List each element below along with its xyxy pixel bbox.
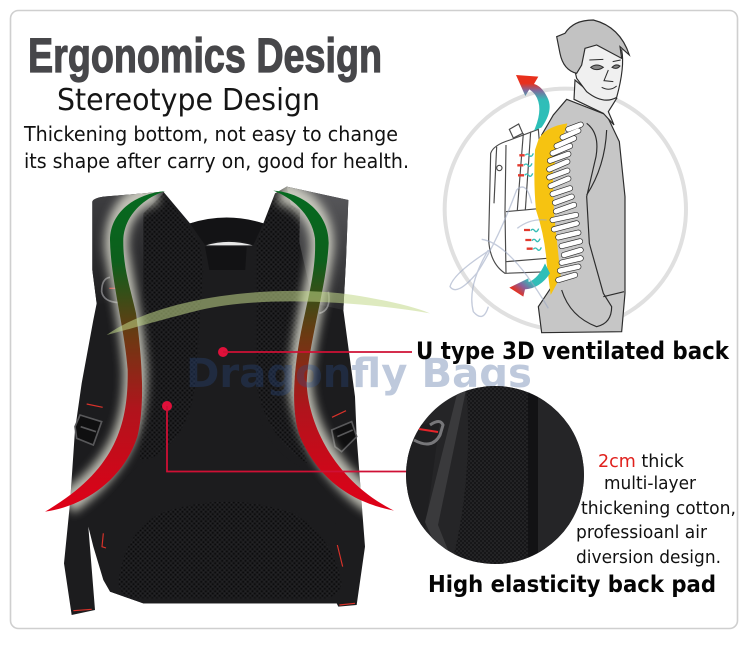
mesh centre — [450, 386, 530, 570]
backpack side view — [489, 124, 549, 273]
description text: Thickening bottom, not easy to change — [23, 122, 398, 146]
spine — [549, 125, 581, 280]
handle gap highlight — [206, 242, 253, 245]
description: back pad — [576, 452, 736, 568]
right shoulder panel shading — [287, 187, 348, 310]
backpack photo — [45, 187, 430, 615]
right side panel — [538, 397, 584, 553]
description: back pad: thickening cotton, — [581, 499, 736, 519]
watermark: Dragonfly Bags — [186, 351, 532, 397]
description text — [23, 122, 409, 173]
right mesh pad — [257, 195, 307, 463]
ring behind the figure — [445, 89, 686, 330]
lighter fold — [425, 390, 466, 560]
description: back pad: multi-layer — [604, 474, 697, 494]
label: back pad: High elasticity back pad — [428, 570, 716, 598]
left shoulder panel shading — [92, 192, 163, 303]
detail circle: back pad close-up — [400, 386, 585, 570]
upward airflow arrow — [516, 75, 550, 131]
neck and collar — [574, 80, 617, 125]
centre column — [100, 270, 340, 603]
description: back pad: 2cm thick — [598, 452, 685, 472]
arm outline — [562, 123, 624, 327]
watermark swoosh — [107, 291, 430, 335]
red strap stitching — [73, 288, 355, 611]
left buckle — [75, 415, 102, 445]
watermark dragonfly strokes — [450, 187, 548, 316]
ring and strap — [414, 422, 443, 444]
right buckle — [332, 422, 357, 452]
description text: its shape after carry on, good for health. — [24, 149, 409, 173]
subtitle: Stereotype Design — [57, 83, 320, 118]
callout line: ventilated back — [218, 347, 412, 357]
description: back pad: diversion design. — [576, 548, 721, 568]
face features — [589, 59, 621, 89]
bottom mesh panel — [118, 502, 342, 598]
heat arrows — [517, 153, 541, 250]
callout line: back pad — [162, 401, 410, 472]
illustration: person wearing backpack — [445, 20, 686, 333]
strap rings — [102, 277, 329, 313]
left ergonomic curve — [45, 191, 165, 512]
red stitching — [419, 429, 438, 432]
hair — [557, 20, 629, 73]
head — [572, 40, 623, 100]
yellow back padding — [534, 123, 567, 295]
left mesh strap — [406, 424, 425, 530]
left mesh pad — [140, 193, 203, 460]
description: back pad: professioanl air — [576, 523, 708, 543]
top carry handle — [190, 217, 263, 245]
body and sweater — [538, 99, 625, 333]
arc glow — [67, 192, 380, 507]
right dark seam — [528, 386, 538, 570]
backpack silhouette — [64, 187, 365, 615]
title: Ergonomics Design — [28, 30, 382, 83]
downward airflow arrow — [509, 263, 550, 297]
right ergonomic curve — [273, 191, 394, 511]
hanging loop tab — [205, 247, 247, 280]
